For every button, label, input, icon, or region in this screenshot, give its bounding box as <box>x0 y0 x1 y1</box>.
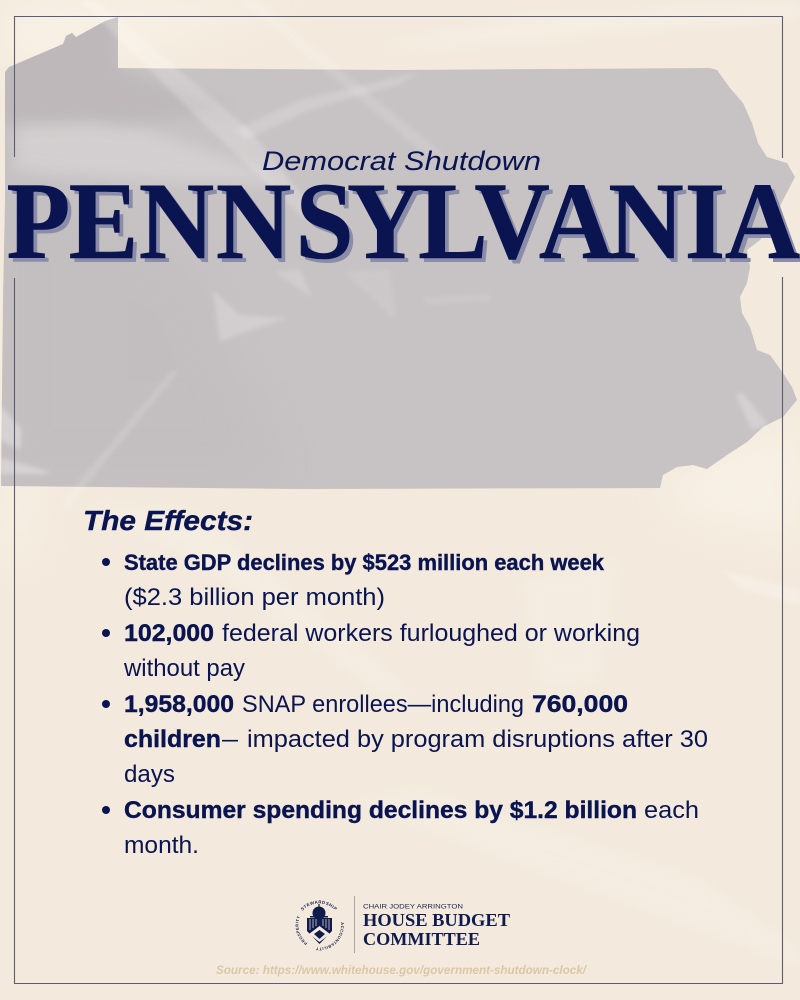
bullet: state GDP: ($2.3 billion per month) <box>124 584 385 611</box>
bullet: federal workers: federal workers furloughed or working <box>222 620 640 647</box>
bullet: consumer spending <box>102 797 699 859</box>
subtitle: Democrat Shutdown <box>262 146 541 176</box>
bullet: SNAP: 760,000 <box>532 691 628 718</box>
bullet: state GDP <box>102 550 605 611</box>
logo: House Budget Committee <box>296 896 510 953</box>
icon: committee seal: STEWARDSHIP <box>300 900 337 910</box>
bullet: consumer spending: Consumer spending declines by $1.2 billion <box>124 797 637 824</box>
logo: House Budget Committee: COMMITTEE <box>363 929 480 949</box>
logo text: CHAIR JODEY ARRINGTON <box>363 904 463 910</box>
bullet: SNAP: days <box>124 761 175 788</box>
bullet: SNAP: 1,958,000 <box>124 691 234 718</box>
title face: PENNSYLVANIA <box>7 161 800 283</box>
bullet: federal workers: without pay <box>123 655 245 682</box>
title: PENNSYLVANIA <box>7 161 800 287</box>
bullet: SNAP <box>102 691 708 788</box>
bullet: SNAP: — <box>222 726 238 753</box>
bullet: SNAP: children <box>124 726 221 753</box>
icon: committee seal <box>296 900 344 950</box>
bullet: federal workers <box>102 620 640 682</box>
map shading <box>6 22 188 120</box>
bullet: SNAP: impacted by program disruptions after 30 <box>247 726 708 753</box>
bullet list <box>102 550 708 859</box>
bullet: state GDP: State GDP declines by $523 million each week <box>124 550 605 575</box>
bullet: federal workers: 102,000 <box>124 620 214 647</box>
bullet: SNAP: SNAP enrollees—including <box>242 691 524 718</box>
heading: The Effects: The Effects: <box>83 505 253 536</box>
map: Pennsylvania silhouette <box>1 17 797 489</box>
title shadow: PENNSYLVANIA <box>11 165 800 287</box>
icon: committee seal: ACCOUNTABILITY <box>316 922 344 950</box>
source line: Source: https://www.whitehouse.gov/government-shutdown-clock/ <box>216 965 588 977</box>
bullet: consumer spending: month. <box>124 832 199 859</box>
logo: House Budget Committee: HOUSE BUDGET <box>363 910 510 930</box>
logo divider <box>354 896 355 953</box>
bullet: consumer spending: each <box>644 797 699 824</box>
icon: committee seal: PROSPERITY <box>296 916 308 945</box>
